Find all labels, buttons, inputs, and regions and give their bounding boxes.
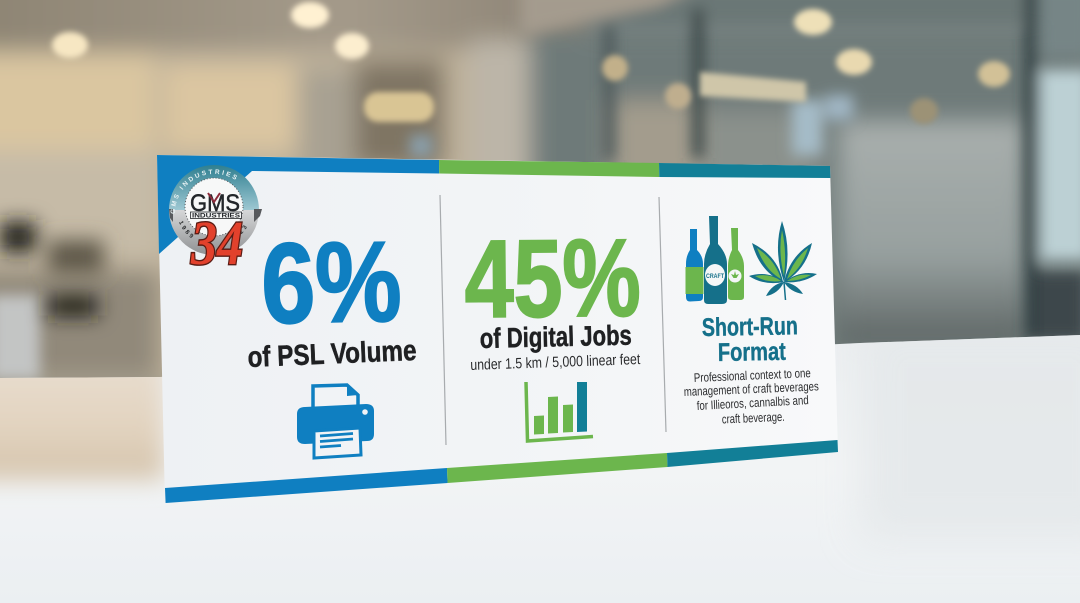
panel: digital jobs	[464, 216, 641, 441]
teal bottle	[704, 216, 727, 304]
panel: card	[157, 155, 838, 503]
ring text: 2023: 2023	[230, 225, 247, 238]
logo wordmark: GMS: GMS	[190, 190, 240, 217]
logo wordmark: INDUSTRIES: INDUSTRIES	[192, 214, 240, 220]
card base	[157, 155, 838, 503]
green bottle	[728, 228, 744, 300]
sublabel: distance: under 1.5 km / 5,000 linear feet	[470, 351, 641, 374]
bottom band: teal	[667, 440, 838, 467]
body text: Professional context to one	[694, 366, 811, 385]
ring text: 1989: 1989	[179, 220, 194, 238]
bottom band: green	[447, 453, 668, 483]
label: of Digital Jobs: of Digital Jobs	[479, 320, 632, 354]
frosted glass panel	[838, 120, 1028, 345]
bottom band: blue	[165, 468, 448, 503]
body text: craft beverage.	[722, 410, 785, 426]
top band: teal	[659, 163, 830, 178]
body text: for Illieoros, cannalbis and	[696, 393, 809, 413]
blue bottle	[686, 229, 703, 302]
body text	[684, 366, 819, 426]
icon: bar chart	[526, 382, 593, 441]
body text: management of craft beverages	[684, 379, 819, 399]
panel: short-run format	[684, 216, 819, 426]
table surface	[0, 335, 1080, 603]
heading: Format: Format	[718, 338, 786, 367]
icon: cannabis leaf	[749, 221, 817, 300]
top band: green	[439, 160, 659, 177]
heading: Short-Run: Short-Run	[702, 312, 798, 342]
logo numeral: 34: 34	[190, 210, 243, 278]
logo: GMS Industries 34 years badge	[169, 165, 262, 278]
stat: 45%: 45%	[464, 216, 641, 341]
label: of PSL Volume: of PSL Volume	[247, 335, 417, 374]
ring text: industries: GMS INDUSTRIES	[170, 169, 237, 214]
icon: craft bottles	[686, 216, 744, 304]
panel: PSL volume	[247, 219, 417, 458]
table reflections	[0, 320, 1080, 540]
icon: printer	[297, 385, 374, 458]
top band: blue with corner	[157, 155, 439, 254]
stat: 6%: 6%	[260, 219, 402, 348]
bottle label text: CRAFT	[706, 273, 724, 280]
